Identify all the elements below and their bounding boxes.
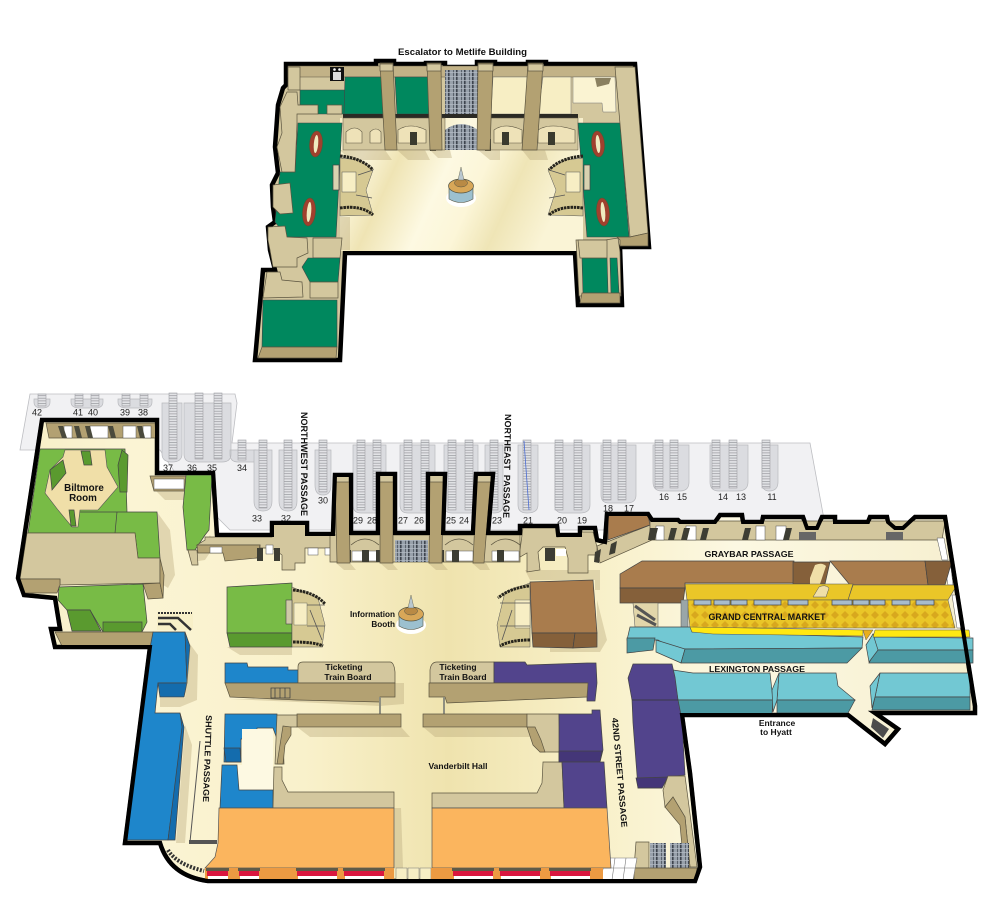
floor shadows: [340, 150, 548, 250]
tracks 18 to 11: [601, 440, 778, 514]
green upper left room: [300, 90, 345, 114]
tracks 18 to 11: 14: [718, 492, 728, 502]
southeast escalators: [634, 842, 697, 880]
Information Booth label: Information: [350, 610, 395, 619]
Biltmore Room floor: [45, 450, 118, 527]
shuttle passage rail: [189, 741, 217, 844]
purple store along 42nd: [628, 664, 685, 788]
orange Vanderbilt east: [432, 808, 611, 868]
right staircase: [548, 156, 590, 216]
Vanderbilt hall east wing: [396, 710, 611, 880]
arcade niches: [410, 132, 555, 151]
ticket gate stripes: [271, 688, 290, 698]
doors center: [396, 868, 431, 880]
Graybar wall band: [648, 521, 945, 540]
Biltmore dark niches: [50, 450, 128, 526]
tracks 37 to 34: 37: [163, 463, 173, 473]
escalator by market: [633, 603, 658, 627]
Lexington Passage label: LEXINGTON PASSAGE: [709, 664, 805, 674]
floor shadows north: [336, 563, 600, 590]
tracks 33 to 30: 32: [281, 514, 291, 524]
tracks 18 to 11: 16: [659, 492, 669, 502]
arch in market wall: [813, 586, 829, 597]
Biltmore Room label second line: Room: [69, 493, 97, 504]
west ticketing group: [225, 662, 404, 715]
white opening: [150, 476, 186, 491]
green top rooms: [344, 77, 430, 114]
Shuttle Passage label: SHUTTLE PASSAGE: [201, 715, 214, 803]
tracks 37 to 34: 35: [207, 463, 217, 473]
Northwest Passage label: NORTHWEST PASSAGE: [299, 412, 309, 516]
Biltmore Room label: Biltmore: [64, 483, 104, 494]
lower green block: [58, 584, 147, 632]
gallery wall east: [423, 714, 527, 727]
Hyatt entrance stairs: [871, 718, 889, 738]
ticketing shadows: [230, 683, 404, 706]
purple ticketing store: [494, 662, 597, 701]
Graybar Passage label: GRAYBAR PASSAGE: [704, 549, 794, 559]
tracks 42 to 38: 42: [32, 408, 42, 418]
tracks 21 to 19: [518, 440, 590, 526]
cream interior: [237, 729, 273, 790]
teal stores north Lexington: [627, 627, 973, 663]
tracks 33 to 30: 33: [252, 514, 262, 524]
market food counters: [694, 600, 934, 605]
left tower: [258, 272, 338, 358]
west tan block: [20, 533, 164, 599]
Ticketing label east: Ticketing: [439, 662, 477, 672]
green south corridor: [302, 258, 340, 282]
ticketing counter front east: [429, 683, 588, 703]
right wall block: [615, 67, 648, 246]
tracks 29 to 23: 25: [446, 516, 456, 526]
tracks 21 to 19: 20: [557, 516, 567, 526]
upper floor plan: [255, 61, 649, 360]
tracks 42 to 38: 40: [88, 408, 98, 418]
tracks 29 to 23: 24: [459, 516, 469, 526]
tracks 21 to 19: 21: [523, 516, 533, 526]
tracks 18 to 11: 11: [767, 492, 777, 502]
Northeast Passage label: NORTHEAST PASSAGE: [501, 414, 513, 518]
tracks 42 to 38: 39: [120, 408, 130, 418]
arcade wall: [343, 118, 578, 150]
gallery rail: [343, 114, 578, 118]
pillars north: [335, 475, 491, 563]
central escalators: [445, 70, 478, 150]
west storefront band: [205, 868, 394, 880]
tracks 29 to 23: 26: [414, 516, 424, 526]
tracks 42 to 38: 41: [73, 408, 83, 418]
tracks 37 to 34: [162, 393, 256, 473]
tracks 33 to 30: [252, 440, 331, 524]
southeast doors: [601, 858, 637, 880]
tan corner west: [273, 715, 394, 808]
east storefront band: [431, 868, 603, 880]
tracks 29 to 23: 23: [492, 516, 502, 526]
tracks 37 to 34: 34: [237, 463, 247, 473]
Biltmore block dividers: [80, 512, 127, 533]
Grand Central Market label: GRAND CENTRAL MARKET: [708, 612, 826, 622]
track plan background: [20, 394, 826, 530]
tan corner east: [432, 714, 564, 808]
southwest tan strip: [55, 632, 153, 646]
blue ticketing store: [225, 663, 298, 683]
blue lower stores: [224, 714, 277, 762]
north arcade wall: [330, 535, 520, 562]
tracks 29 to 23: 28: [367, 516, 377, 526]
blue west store: [127, 632, 190, 840]
shadows around Biltmore and blocks: [155, 490, 607, 868]
top wall band: [288, 66, 633, 77]
green block by 33: [183, 475, 212, 550]
left staircase: [333, 156, 373, 216]
teal stores south Lexington: [673, 670, 970, 714]
Train Board label east: Train Board: [439, 672, 487, 682]
north arcade openings: [345, 539, 520, 562]
lower right annex: [576, 238, 621, 303]
market bright yellow strips: [690, 627, 970, 640]
Grand Central Market back wall: [685, 584, 957, 600]
heading: escalator to Metlife Building: Escalator to Metlife Building: [398, 47, 527, 58]
post: [379, 697, 381, 715]
tracks 29 to 23: 27: [398, 516, 408, 526]
escalator by blue: [157, 612, 193, 630]
tan curve southeast: [663, 776, 697, 867]
left wall blocks: [268, 67, 342, 267]
north wall west section: [188, 523, 334, 570]
northeast wall section: [520, 528, 597, 573]
tracks 29 to 23: [353, 440, 503, 526]
Vanderbilt hall west wing: [205, 714, 410, 880]
tracks 21 to 19: 19: [577, 516, 587, 526]
cream top right rooms: [491, 77, 616, 114]
Grand Central Market floor: [687, 600, 955, 628]
left oval concessions: [301, 130, 324, 227]
tracks 18 to 11: 18: [603, 504, 613, 514]
arcade openings: [346, 126, 575, 143]
east windows: [937, 538, 964, 628]
right center staircase: [497, 583, 530, 647]
green right hall: [578, 123, 629, 237]
tracks 29 to 23: 29: [353, 516, 363, 526]
ticketing counter front west: [225, 683, 395, 702]
Booth label: Booth: [371, 620, 395, 629]
purple east stores: [559, 710, 603, 762]
tracks 42 to 38: [32, 394, 152, 418]
Biltmore top wall: [46, 423, 156, 438]
ticketing board west: [298, 662, 395, 683]
42nd Street Passage label: 42ND STREET PASSAGE: [610, 717, 630, 828]
Train Board label west: Train Board: [324, 672, 372, 682]
to Hyatt label: to Hyatt: [760, 727, 792, 737]
orange Vanderbilt west: [205, 808, 394, 868]
Ticketing label west: Ticketing: [325, 662, 363, 672]
right oval concessions: [590, 130, 611, 227]
upper floor outline: [255, 61, 649, 360]
east storefronts: [453, 871, 590, 876]
tracks 18 to 11: 13: [736, 492, 746, 502]
Graybar brown stores: [620, 561, 952, 603]
left center staircase: [286, 587, 325, 647]
tracks 42 to 38: 38: [138, 408, 148, 418]
west storefronts: [207, 871, 384, 876]
Entrance label: Entrance: [759, 718, 795, 728]
restroom icon: [330, 67, 344, 81]
main concourse outline: [18, 420, 975, 881]
gallery wall west: [297, 714, 401, 727]
ticketing board east: [430, 662, 494, 683]
tracks 33 to 30: 30: [318, 496, 328, 506]
green center block: [227, 583, 292, 647]
Vanderbilt Hall label: Vanderbilt Hall: [428, 761, 488, 771]
tracks 18 to 11: 17: [624, 504, 634, 514]
information booth: [396, 595, 426, 634]
diagonal wall to Graybar: [594, 515, 652, 563]
tracks 18 to 11: 15: [677, 492, 687, 502]
brown center block: [530, 580, 597, 648]
Biltmore green block: [28, 449, 160, 558]
east ticketing group: [429, 662, 597, 715]
upper floor concourse floor: [340, 118, 583, 251]
information booth upper: [446, 167, 476, 207]
market west stairs: [681, 600, 688, 630]
shuttle passage shadows: [160, 644, 198, 843]
tracks 37 to 34: 36: [187, 463, 197, 473]
green left hall: [275, 123, 342, 237]
pillars: [380, 63, 543, 150]
southwest curved stairs: [168, 850, 204, 871]
post: [443, 697, 445, 715]
outline redraw: [18, 420, 975, 881]
